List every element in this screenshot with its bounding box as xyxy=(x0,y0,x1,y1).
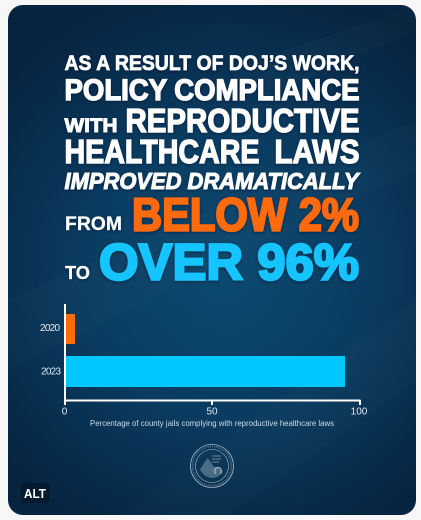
bar chart xyxy=(40,304,368,428)
badge: ALT: ALT xyxy=(24,486,46,501)
axis caption: Percentage of county jails complying with reproductive healthcare laws xyxy=(90,418,334,428)
heading line 1: AS A RESULT OF DOJ’S WORK, xyxy=(64,51,360,75)
heading line 3: REPRODUCTIVE xyxy=(126,102,360,139)
badge: ALT xyxy=(21,483,50,503)
heading line 2: POLICY COMPLIANCE xyxy=(64,74,360,107)
y axis xyxy=(64,304,66,402)
label: 2023: 2023 xyxy=(41,366,61,378)
heading line 4 right: LAWS xyxy=(274,133,360,170)
bar: 2020 xyxy=(65,314,75,344)
tick: 100: 100 xyxy=(351,406,368,418)
below 2 percent: BELOW 2% xyxy=(132,188,359,240)
heading line 4 left: HEALTHCARE xyxy=(64,133,260,170)
x axis xyxy=(64,400,360,405)
to label: TO xyxy=(65,263,90,283)
heading line 5: IMPROVED DRAMATICALLY xyxy=(64,168,361,194)
over 96 percent: OVER 96% xyxy=(99,234,359,290)
label: 2020: 2020 xyxy=(40,323,60,334)
tick: 0: 0 xyxy=(62,406,68,418)
title xyxy=(64,51,361,290)
tick: 50: 50 xyxy=(206,406,218,418)
heading line 3 prefix: WITH xyxy=(64,115,118,137)
icon: department seal xyxy=(190,444,234,488)
bar: 2023 xyxy=(65,356,345,387)
from label: FROM xyxy=(65,214,122,235)
